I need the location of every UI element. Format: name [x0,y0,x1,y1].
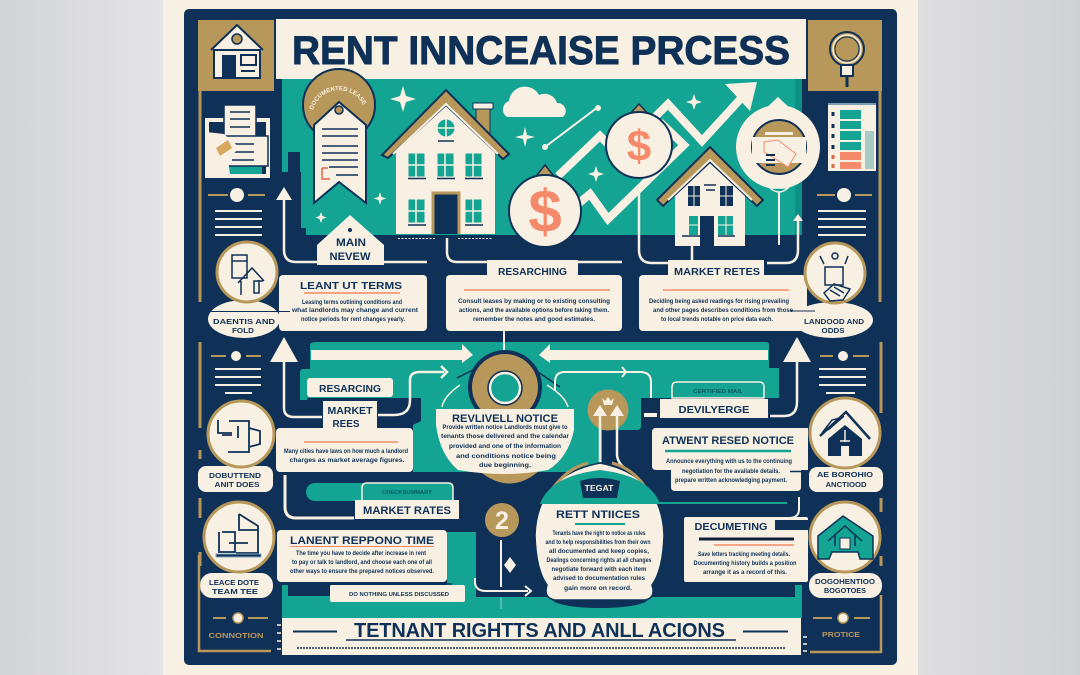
right dot divider and lines, lower [819,351,869,393]
navy block by deliverables [642,398,660,418]
icon badge: house and hood [809,398,883,492]
arrow: devil tab connector [555,367,651,398]
footer frame: left [199,555,271,651]
tab: deliverables [672,382,764,398]
footer right caption: PROTICE [822,632,860,639]
callout: rent notices: negotiate forward with each item [552,567,646,573]
tag: main review [317,215,384,265]
left dot divider and lines, lower [211,351,261,393]
card: attend revised notice: ATWENT RESED NOTICE [662,435,794,447]
teal upper background [281,79,802,236]
arrowhead: right up [793,214,803,221]
navy block behind market label [307,398,421,428]
label: market rates: MARKET RETES [674,266,760,278]
label: deliverables [660,399,768,418]
card: attend revised notice: prepare written acknowledging payment. [675,478,787,484]
icon: cloud [503,87,566,117]
main house illustration [382,90,509,238]
callout: rent notices: Tenants have the right to notice as rules [552,531,646,537]
tab: deliverables: CERTIFIED MAIL [693,389,744,395]
icon badge: documenting and bids [198,401,274,492]
callout: rent notices: advised to documentation rules [553,576,646,582]
card: researching: actions, and the available options before taking them. [459,308,609,314]
icon badge: house and lease [208,242,290,338]
callout: rent notices [535,463,664,608]
label: researching, middle [307,378,393,397]
card: lease terms: Leasing terms outlining conditions and [302,300,402,306]
footer banner [277,618,807,655]
connector: to documenting [778,497,799,518]
icon: light bulb in gold box [808,20,882,91]
connector from upper row [503,331,505,352]
left dot divider and lines [208,188,265,235]
step number 2: 2 [495,507,509,535]
label: deliverables: DEVILYERGE [678,404,750,416]
teal middle background [300,342,779,472]
side gold dashes [200,342,881,566]
card: market rates: to local trends notable on price data each. [661,317,773,323]
card: documenting: DECUMETING [694,521,768,533]
teal divider line [658,502,787,504]
card: tenant response time: LANENT REPPONO TIME [290,535,434,547]
callout: revlivell notice: provided and one of the information [449,444,561,450]
icon badge: landlord and odds: ODDS [822,326,844,335]
label: market rates lower: MARKET RATES [363,505,451,517]
right gold rule [878,91,882,302]
note strip: DO NOTHING UNLESS DISCUSSED [349,592,449,598]
stem and diamond [501,540,516,609]
badge: document ribbon [302,68,376,205]
icon badge: documenting house: BOGOTOES [824,586,866,595]
callout: rent notices: Dealings concerning rights at all changes [546,558,652,564]
icon badge: lease and term: TEAM TEE [212,587,258,596]
teal lower background [282,532,802,618]
tag: main review: MAIN [336,237,366,249]
handshake badge [736,97,820,192]
footer frame: right [810,595,881,652]
icon badge: lease and term [200,502,274,598]
icon badge: landlord and odds [790,243,873,338]
arrow: left big up [270,337,447,417]
card: tenant response time [277,530,447,582]
small house illustration [657,147,763,246]
callout: revlivell notice [436,409,574,484]
callout: rent notices: TEGAT [584,483,614,493]
callout: revlivell notice: Provide written notice Landlords must give to [442,425,568,431]
icon badge: documenting and bids: DOBUTTEND [209,471,262,480]
card: documenting: Documenting history builds a position [694,561,797,567]
badge: gold arrows [588,390,628,470]
label: market rees [323,401,377,430]
small coin: dollar: $ [627,122,651,171]
icon badge: house and hood: AE BOROHIO [817,470,873,479]
card: tenant response time: The time you have to decide after increase in rent [296,551,426,557]
callout: rent notices: and to help responsibilities from their own [546,540,651,546]
poster sheet [163,0,918,675]
card: lease terms: what landlords may change and current [291,308,418,314]
card: market rates [639,275,807,331]
icon badge: landlord and odds: LANDOOD AND [804,317,865,326]
step number 2 [485,503,519,537]
callout: rent notices: gain more on record. [564,586,632,592]
card: researching: remember the notes and good estimates. [473,317,595,323]
card: lease terms [279,275,427,331]
icon badge: documenting house: DOGOHENTIOO [815,577,875,586]
footer banner: TETNANT RIGHTTS AND ANLL ACIONS [354,620,725,642]
navy panel [184,9,897,665]
icon: house in gold box [198,20,274,91]
footer left caption: CONNOTION [208,633,264,640]
right dot divider and lines [817,188,872,235]
icon badge: documenting and bids: ANIT DOES [214,480,260,489]
icon badge: lease and term: LEACE DOTE [209,578,259,587]
card: documenting [684,517,808,582]
callout: revlivell notice: tenants those delivered and the calendar [441,434,570,440]
icon badge: documenting house [809,502,882,598]
card: documenting: Save letters tracking meeting details. [698,552,790,558]
footer left caption [208,613,268,640]
card: market rees detail: charges as market average figures. [290,458,405,464]
callout: revlivell notice: due beginning. [479,463,531,469]
arrow: right-pointing band [311,344,473,363]
teal pill behind market rates [306,483,376,501]
arrowhead: left up [276,187,292,200]
card: market rees detail: Many cities have laws on how much a landlord [284,449,408,455]
callout: revlivell notice: and conditions notice being [456,454,556,460]
tag: main review: NEVEW [330,251,371,263]
card: market rates: Deciding being asked readings for rising prevailing [649,299,789,305]
card: attend revised notice [652,428,808,491]
arrow: into rent notices [475,578,531,596]
callout: rent notices: RETT NTIICES [556,509,640,521]
icon badge: house and hood: ANCTIOOD [826,480,867,489]
label: market rees: MARKET [328,405,373,417]
navy strip in teal [288,583,330,596]
left gold rule [198,91,202,302]
tab: market rates lower: CHECKSUMMARY [382,490,432,496]
card: researching [446,275,622,331]
card: lease terms: LEANT UT TERMS [300,280,402,292]
arrow: right big up [770,337,811,416]
notice gold ring [442,350,568,424]
large coin: dollar [509,165,581,247]
title banner: RENT INNCEAISE PRCESS [292,29,790,73]
badge: document ribbon: DOCUMENTED LEASE [309,86,367,110]
card: market rates: and other pages describes conditions from those [653,308,794,314]
card: researching: Consult leases by making or to existing consulting [458,299,610,305]
card: attend revised notice: negotiation for the available details. [682,469,780,475]
chart: rising zigzag arrow [558,82,757,219]
card: market rees detail [276,428,413,472]
connector from handshake [778,190,780,245]
card: tenant response time: other ways to ensure the prepared notices observed. [290,569,434,575]
connector: lower left [285,475,354,518]
label: market rates [668,260,764,278]
label: researching: RESARCHING [498,267,567,278]
card: tenant response time: to pay or talk to landlord, and choose each one of all [292,560,432,566]
note strip [330,584,465,602]
icon: bar chart card [828,103,876,171]
label: market rates lower [355,500,459,519]
icon: documents and hand [205,105,270,178]
footer right caption [813,613,870,639]
tab: market rates lower [362,483,453,501]
icon badge: house and lease: DAENTIS AND [213,317,276,326]
small coin: dollar [606,104,672,178]
callout: rent notices: all documented and keep copies, [549,549,649,555]
label: market rees: REES [332,418,360,430]
sparkles [316,86,702,223]
card: documenting: arrange it as a record of this. [703,570,787,576]
large coin: dollar: $ [528,178,562,245]
callout: revlivell notice: REVLIVELL NOTICE [452,413,558,425]
trend line with end dots [542,105,601,150]
arrow: left-pointing band [539,344,768,363]
label: researching [487,260,578,278]
small dash [644,413,657,417]
card: attend revised notice: Announce everything with us to the continuing [666,459,792,465]
label: researching, middle: RESARCING [319,383,381,395]
arrows: upper flow connectors [284,187,798,263]
icon badge: house and lease: FOLD [232,326,255,335]
card: lease terms: notice periods for rent changes yearly. [301,317,405,323]
